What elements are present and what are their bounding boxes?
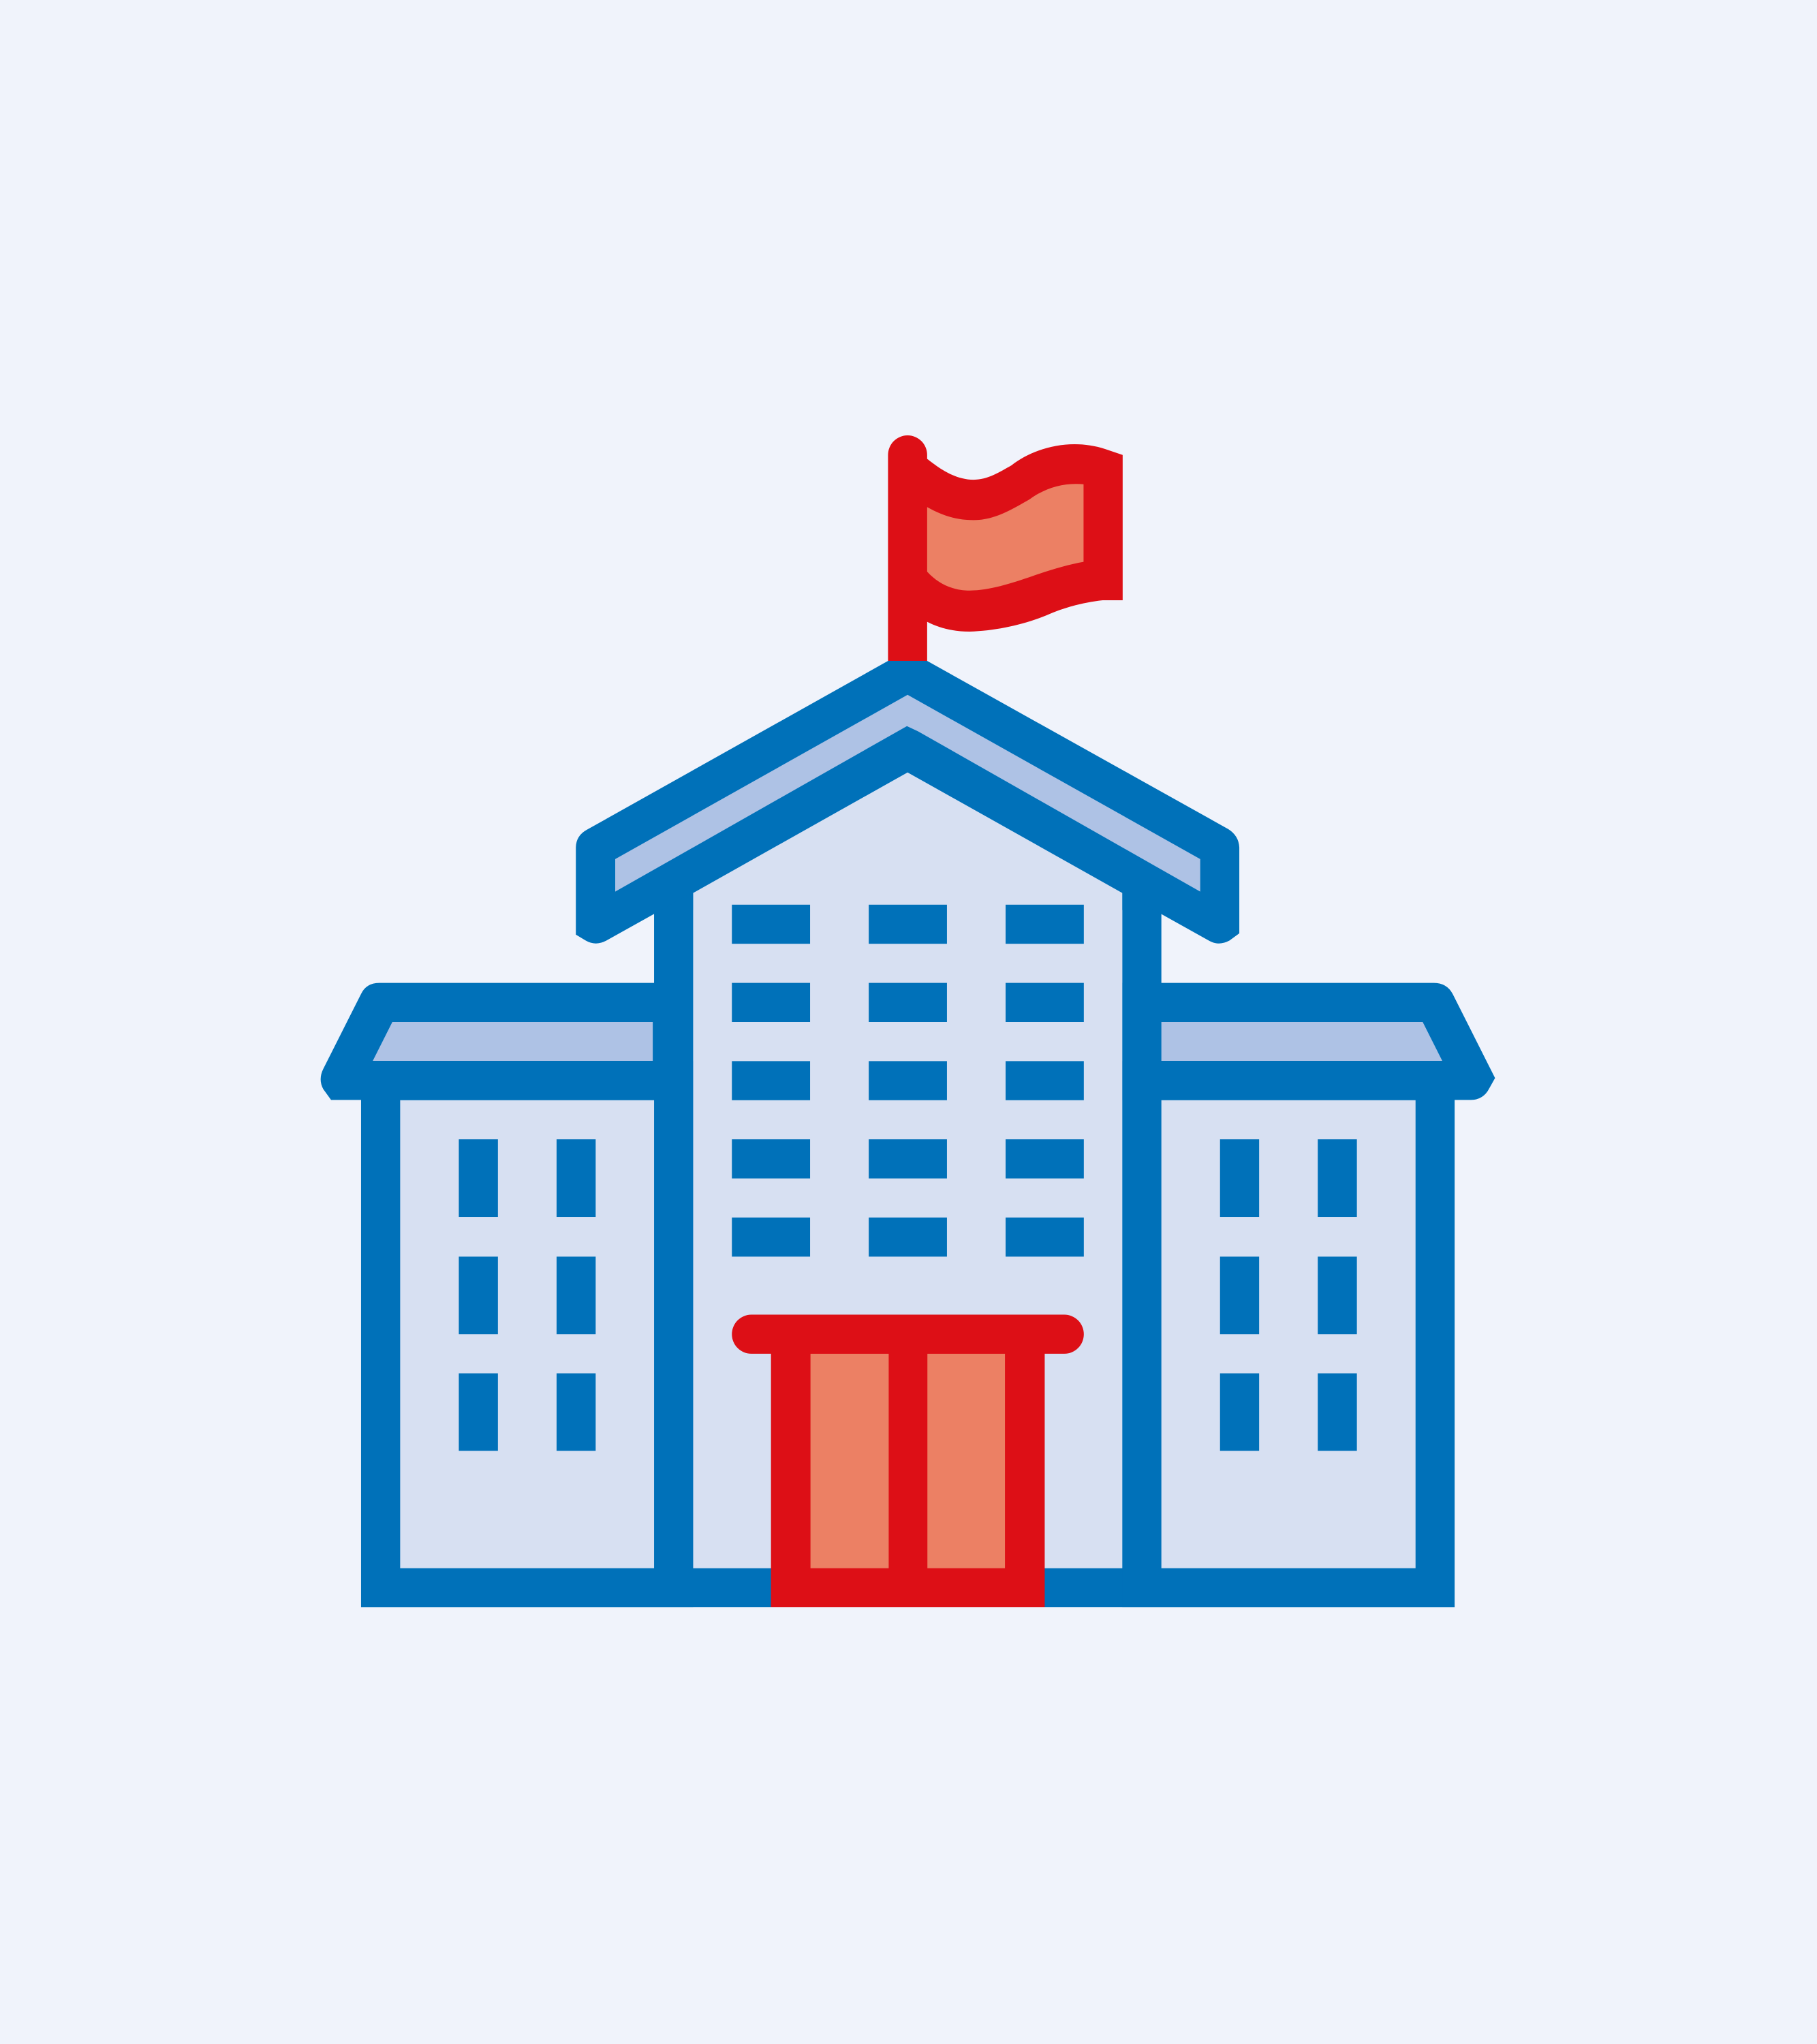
roof band <box>615 695 1200 892</box>
panel: right wing <box>1122 983 1495 1588</box>
left wing roof <box>321 983 692 1100</box>
tower windows <box>732 905 1084 1256</box>
main roof <box>576 661 1239 944</box>
panel: left wing <box>321 983 692 1588</box>
entrance door <box>732 1315 1084 1607</box>
icon: flag <box>888 435 1123 661</box>
panel: central tower fill <box>693 773 1122 1568</box>
main tower wall <box>674 749 1142 1588</box>
right wing roof <box>1122 983 1495 1100</box>
right wing windows <box>1220 1139 1357 1451</box>
left wing windows <box>459 1139 595 1451</box>
